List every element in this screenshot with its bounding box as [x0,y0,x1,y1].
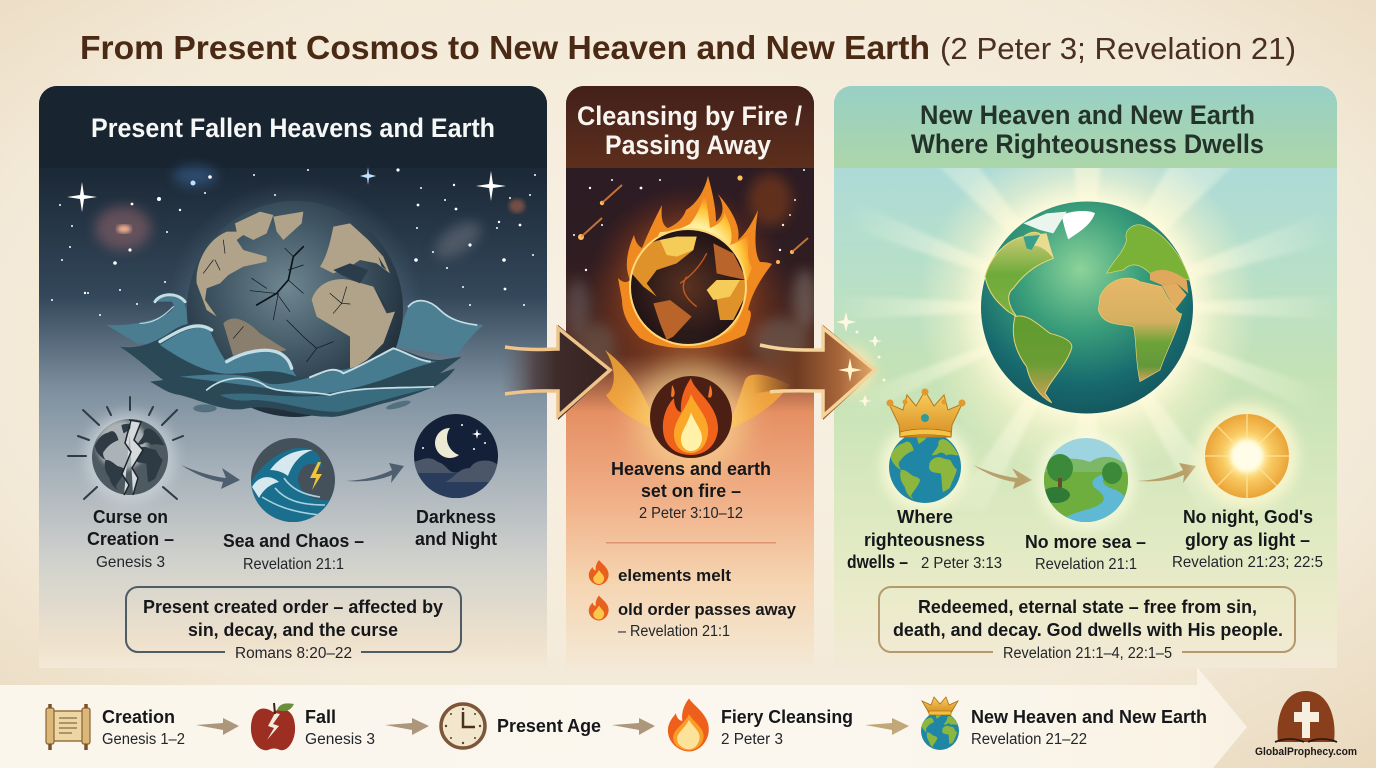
caption: no night: Revelation 21:23; 22:5 [1172,554,1323,571]
panel: cleansing by fire [566,86,817,668]
callout: present created order: Romans 8:20–22 [235,645,352,662]
icon: flame [668,698,709,752]
caption: heavens and earth set on fire: 2 Peter 3:10–12 [639,505,743,522]
timeline: creation: Creation [102,707,175,727]
panel heading: cleansing by fire [577,101,802,160]
panel heading: present fallen: Present Fallen Heavens and Earth [91,113,495,143]
arrow: curse to sea [181,465,240,489]
caption: no night: No night, God's [1183,507,1313,527]
caption: where righteousness dwells [848,510,1002,568]
panel: present fallen heavens and earth [39,86,547,668]
caption: curse on creation [88,510,174,567]
waves [107,295,483,417]
caption: where righteousness dwells: righteousness [864,530,985,550]
icon: scroll [46,704,90,750]
arrow: timeline 3 [612,718,655,735]
caption: sea and chaos: Sea and Chaos – [223,531,364,551]
caption: curse on creation: Genesis 3 [96,554,165,571]
sparkles [836,312,886,407]
timeline: fall: Fall [305,707,336,727]
icon: sea and chaos [250,438,340,525]
list: effects of fire: elements melt [618,567,732,585]
arrow: no sea to no night [1137,463,1196,483]
panel heading: new heaven [911,100,1264,159]
timeline: new heaven and new earth: New Heaven and New Earth [971,707,1207,727]
callout: present created order: Present created order – affected by [143,597,443,617]
icon: small flame [589,560,609,585]
panel: new heaven and new earth [830,86,1345,668]
caption: curse on creation: Curse on [93,507,168,527]
timeline: fall [251,703,375,750]
rays of light [862,168,1312,490]
timeline: creation: Genesis 1–2 [102,731,185,748]
timeline: present age: Present Age [497,716,601,736]
arrow: timeline 4 [865,718,909,735]
icon: crowned earth [881,388,969,511]
timeline banner [0,667,1247,768]
timeline: new heaven and new earth: Revelation 21–22 [971,731,1087,748]
callout: present created order [126,587,461,662]
icon: clock [441,704,485,748]
arrow: timeline 1 [196,718,239,735]
caption: where righteousness dwells: dwells – [847,552,908,572]
caption: heavens and earth set on fire: Heavens and earth [611,459,771,479]
caption: curse on creation: Creation – [87,529,174,549]
arrow: righteousness to no sea [973,465,1032,489]
icon: broken apple [251,703,295,750]
panel heading: cleansing by fire: Passing Away [605,130,771,160]
arrow: fire to new earth [753,325,877,420]
caption: darkness and night [415,507,497,549]
icon: landscape river [1036,430,1136,530]
stars and meteors [566,169,817,367]
list: effects of fire [589,560,797,640]
callout: redeemed eternal state: Redeemed, eternal state – free from sin, [918,597,1257,617]
icon: crowned globe [921,697,959,750]
icon: cracked earth with waves [107,192,483,417]
title: (2 Peter 3; Revelation 21) [940,31,1296,66]
caption: no more sea: Revelation 21:1 [1035,556,1137,573]
title [80,30,1296,67]
list: effects of fire: – Revelation 21:1 [618,623,730,640]
timeline: fiery cleansing: 2 Peter 3 [721,731,783,748]
timeline: fall: Genesis 3 [305,731,375,748]
heading band: present fallen heavens [39,86,547,104]
arrow: present to fire [500,325,612,420]
icon: renewed earth [834,86,1337,477]
timeline: fiery cleansing [668,698,853,752]
icon: small flame second [589,596,609,620]
icon: sun glory [1195,404,1299,508]
caption: heavens and earth set on fire [612,462,770,518]
arrow: sea to darkness [346,463,404,483]
list: effects of fire: old order passes away [618,601,797,619]
caption: no night [1172,507,1323,571]
caption: no more sea: No more sea – [1025,532,1146,552]
panel heading: cleansing by fire: Cleansing by Fire / [577,101,802,131]
icon: flame badge [635,361,747,473]
timeline: present age [441,704,601,748]
callout: present created order: sin, decay, and the curse [188,620,398,640]
timeline: new heaven and new earth [921,697,1207,750]
callout: redeemed eternal state [879,587,1295,662]
callout: redeemed eternal state: death, and decay. God dwells with His people. [893,620,1283,640]
timeline: fiery cleansing: Fiery Cleansing [721,707,853,727]
callout: redeemed eternal state: Revelation 21:1–4, 22:1–5 [1003,645,1172,662]
caption: sea and chaos [224,534,364,569]
timeline: creation [46,704,185,750]
logo: GlobalProphecy [1255,691,1357,758]
caption: darkness and night: and Night [415,529,497,549]
caption: darkness and night: Darkness [416,507,496,527]
caption: no more sea [1026,535,1146,569]
panel heading: new heaven: New Heaven and New Earth [920,100,1255,130]
panel heading: new heaven: Where Righteousness Dwells [911,129,1264,159]
side flames [605,350,790,430]
caption: no night: glory as light – [1185,530,1310,550]
heading band: cleansing [566,86,814,168]
caption: where righteousness dwells: 2 Peter 3:13 [921,555,1002,572]
icon: cracked globe, curse on creation [68,397,183,503]
icon: darkness and night [414,414,500,500]
icon: earth on fire [596,176,780,366]
title: From Present Cosmos to New Heaven and New Earth [80,30,930,67]
caption: heavens and earth set on fire: set on fire – [641,481,741,501]
caption: sea and chaos: Revelation 21:1 [243,556,344,573]
heading band: new heaven [834,86,1337,102]
starfield and nebulae [51,166,536,316]
logo: GlobalProphecy: GlobalProphecy.com [1255,746,1357,758]
caption: where righteousness dwells: Where [897,507,953,527]
arrow: timeline 2 [385,718,429,735]
